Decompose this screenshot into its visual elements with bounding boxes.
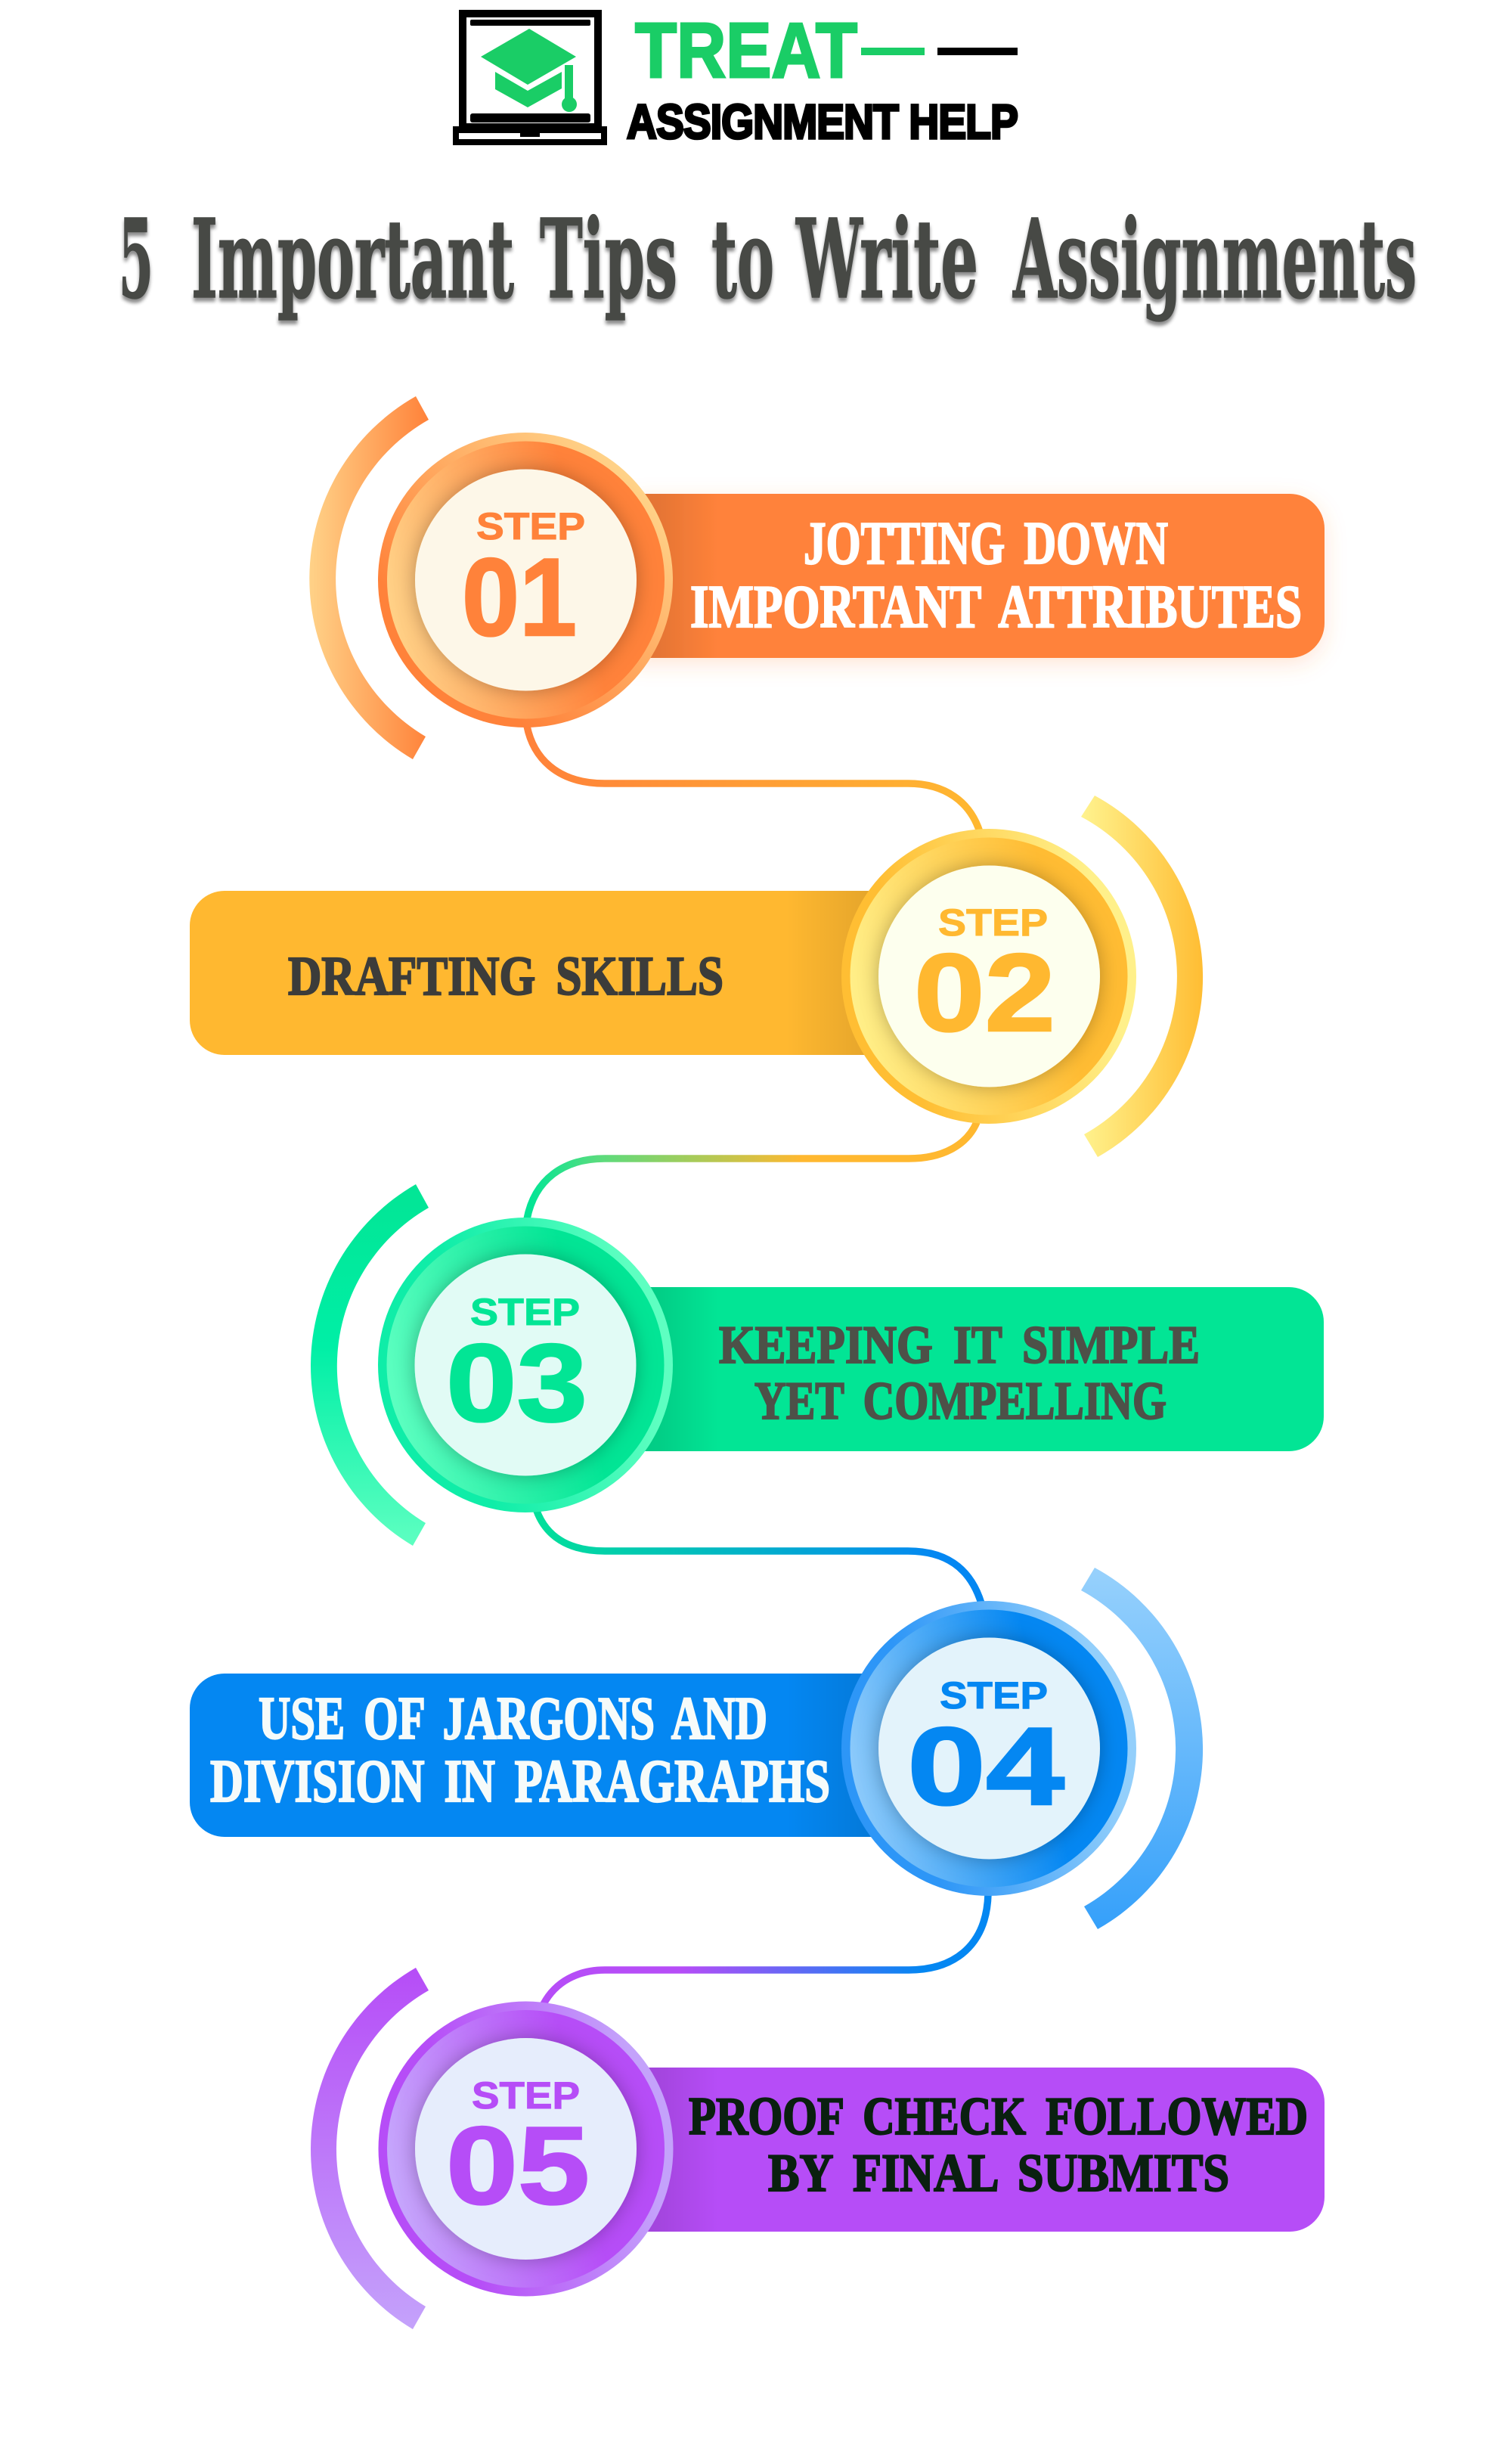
arc: step 3 bbox=[311, 1184, 429, 1546]
arc: step 1 bbox=[309, 396, 429, 759]
label: step 4: DIVISION IN PARAGRAPHS bbox=[210, 1748, 830, 1815]
label: step 3: KEEPING IT SIMPLE bbox=[719, 1316, 1200, 1375]
badge: step 5 bbox=[378, 2001, 673, 2296]
label: step 1: JOTTING DOWN bbox=[804, 510, 1168, 577]
connector: step 2 to step 3 bbox=[527, 1122, 977, 1219]
label: step 5: BY FINAL SUBMITS bbox=[768, 2144, 1229, 2203]
badge: step 1: 01 bbox=[462, 535, 577, 659]
bar: step 1 bbox=[627, 494, 1325, 658]
step 3 panel bbox=[311, 1184, 1324, 1546]
bar: step 3 bbox=[627, 1287, 1324, 1451]
label: step 5: PROOF CHECK FOLLOWED bbox=[689, 2087, 1308, 2146]
connector: step 4 to step 5 bbox=[544, 1894, 988, 2004]
icon: laptop with graduation cap bbox=[453, 14, 607, 145]
bar: step 4 bbox=[190, 1674, 990, 1837]
label: step 4: USE OF JARGONS AND bbox=[259, 1686, 767, 1752]
label: step 5 bbox=[689, 2087, 1308, 2203]
label: step 4 bbox=[210, 1686, 830, 1815]
step 2 panel bbox=[190, 796, 1203, 1157]
badge: step 2: STEP bbox=[938, 901, 1048, 944]
badge: step 4: 04 bbox=[907, 1705, 1064, 1828]
title: Important bbox=[191, 195, 514, 323]
badge: step 1 bbox=[378, 433, 673, 727]
logo wordmark bbox=[627, 7, 1018, 149]
arc: step 4 bbox=[1081, 1568, 1203, 1929]
arc: step 2 bbox=[1081, 796, 1203, 1157]
badge: step 5: STEP bbox=[472, 2074, 580, 2117]
label: step 3 bbox=[719, 1316, 1200, 1431]
arc: step 5 bbox=[311, 1968, 429, 2329]
label: step 1 bbox=[690, 510, 1302, 641]
logo wordmark: TREAT bbox=[635, 7, 857, 94]
label: step 3: YET COMPELLING bbox=[754, 1372, 1167, 1431]
badge: step 3 bbox=[378, 1218, 673, 1512]
step 5 panel bbox=[311, 1968, 1325, 2329]
badge: step 3: 03 bbox=[446, 1321, 587, 1444]
bar: step 2 bbox=[190, 891, 990, 1055]
badge: step 1: STEP bbox=[476, 505, 585, 548]
connector: step 3 to step 4 bbox=[537, 1511, 981, 1603]
badge: step 2: 02 bbox=[914, 931, 1055, 1054]
badge: step 4: STEP bbox=[940, 1674, 1048, 1717]
badge: step 2 bbox=[841, 829, 1136, 1124]
title: Tips bbox=[540, 195, 677, 323]
badge: step 3: STEP bbox=[470, 1291, 580, 1333]
label: step 1: IMPORTANT ATTRIBUTES bbox=[690, 574, 1302, 641]
badge: step 5: 05 bbox=[446, 2104, 590, 2227]
label: step 2: DRAFTING SKILLS bbox=[288, 945, 723, 1007]
logo wordmark: ASSIGNMENT HELP bbox=[627, 95, 1018, 149]
title: to bbox=[711, 195, 774, 323]
bar: step 5 bbox=[627, 2068, 1325, 2232]
logo bbox=[453, 7, 1018, 149]
connector: step 1 to step 2 bbox=[527, 726, 980, 832]
step 1 panel bbox=[309, 396, 1325, 759]
badge: step 4 bbox=[841, 1601, 1136, 1896]
step 4 panel bbox=[190, 1568, 1203, 1929]
title: Write bbox=[795, 195, 978, 323]
title: 5 bbox=[119, 195, 153, 323]
title bbox=[119, 195, 1417, 323]
